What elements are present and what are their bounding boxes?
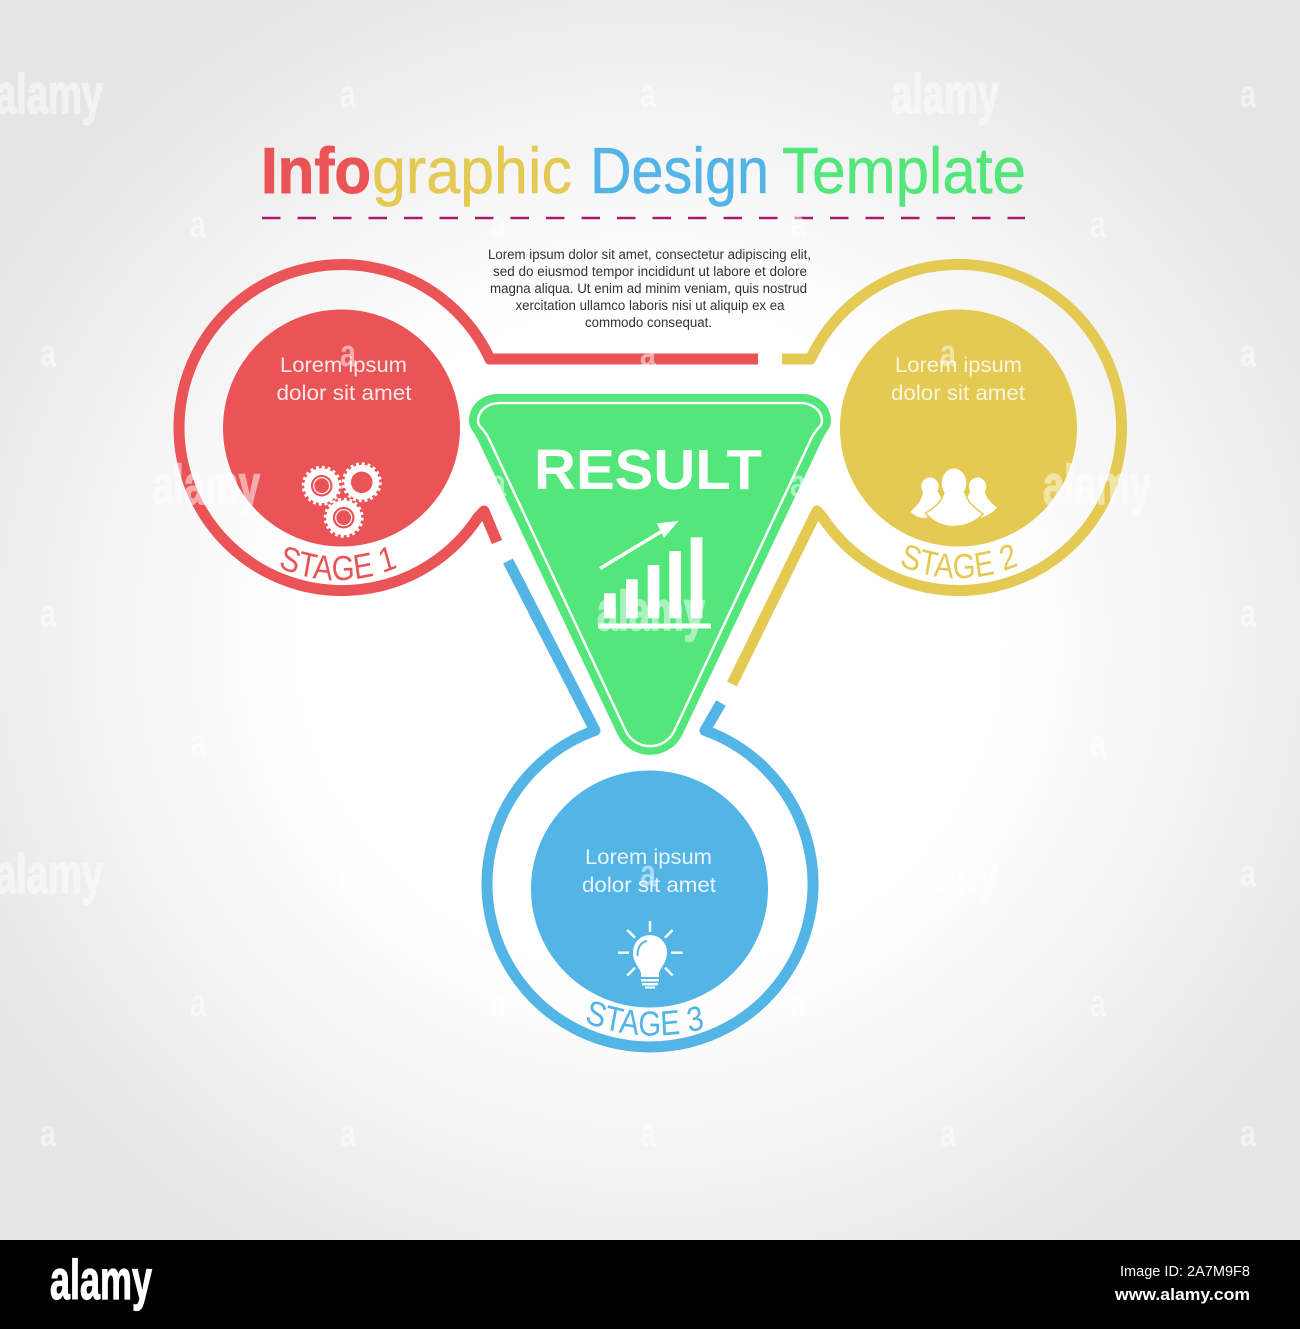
watermarks: small: a [1240, 333, 1257, 375]
watermarks: small: a [1240, 853, 1257, 895]
stage 3 text: Lorem ipsum [585, 846, 712, 869]
watermarks: small: a [1240, 1113, 1257, 1155]
watermarks: large [0, 62, 1151, 905]
intro paragraph: commodo consequat. [585, 315, 712, 330]
watermarks: small: a [490, 723, 507, 765]
panel: stage 1 [174, 259, 758, 596]
watermarks: small: a [940, 1113, 957, 1155]
triangle shape [469, 394, 831, 755]
title: Template [782, 134, 1026, 207]
watermarks: small: a [340, 74, 357, 116]
footer url: www.alamy.com [1114, 1285, 1250, 1304]
watermarks: small: a [190, 204, 207, 246]
triangle inner outline [478, 403, 822, 746]
watermarks: small: a [790, 983, 807, 1025]
intro paragraph: xercitation ullamco laboris nisi ut aliquip ex ea [516, 298, 785, 313]
watermarks: small: a [40, 593, 57, 635]
stage 1 text [276, 354, 412, 405]
footer bar [0, 1240, 1300, 1329]
watermarks: large: alamy [152, 453, 260, 516]
title [261, 134, 1026, 207]
stage 2 label [902, 544, 1018, 578]
watermarks: small: a [940, 333, 957, 375]
title: Design [590, 134, 769, 207]
stage 2 text: Lorem ipsum [895, 354, 1022, 377]
result heading: RESULT [534, 438, 762, 502]
watermarks: large: alamy [597, 579, 705, 642]
stage 2 ring connector [732, 264, 1122, 684]
watermarks: small: a [490, 463, 507, 505]
intro paragraph [488, 247, 811, 330]
footer logo: alamy [50, 1248, 152, 1311]
footer image id: Image ID: 2A7M9F8 [1120, 1263, 1250, 1280]
watermarks: small: a [1240, 593, 1257, 635]
stage 2 text: dolor sit amet [891, 382, 1025, 405]
watermarks: small: a [340, 333, 357, 375]
intro paragraph: magna aliqua. Ut enim ad minim veniam, quis nostrud [490, 281, 807, 296]
watermarks: small: a [1090, 983, 1107, 1025]
stage 1 ring connector [179, 265, 758, 591]
watermarks: small: a [640, 333, 657, 375]
watermarks: small: a [640, 1113, 657, 1155]
intro paragraph: sed do eiusmod tempor incididunt ut labore et dolore [493, 264, 807, 279]
watermarks: small: a [640, 74, 657, 116]
panel: stage 2 [727, 258, 1128, 686]
title: Info [261, 134, 371, 207]
stage 1 label: STAGE 1 [280, 547, 397, 580]
watermarks: small: a [790, 723, 807, 765]
watermarks: small: a [1240, 74, 1257, 116]
panel: result triangle [469, 394, 831, 755]
watermarks: small: a [190, 983, 207, 1025]
stage 3 disc [531, 770, 768, 1008]
icon: rising bar chart [598, 521, 711, 628]
stage 1 disc [223, 310, 460, 546]
stage 2 text [891, 354, 1025, 405]
watermarks: small: a [490, 983, 507, 1025]
stage 2 disc [840, 310, 1077, 546]
watermarks: small: a [40, 333, 57, 375]
stage 1 text: dolor sit amet [276, 382, 412, 405]
watermarks: small: a [790, 463, 807, 505]
watermarks: small: a [940, 593, 957, 635]
icon: people [910, 468, 997, 526]
icon: light bulb [618, 921, 682, 988]
watermarks: small: a [490, 204, 507, 246]
watermarks: small: a [1090, 723, 1107, 765]
stage 3 ring connector [487, 561, 813, 1047]
watermarks: small: a [640, 853, 657, 895]
watermarks: small [40, 74, 1257, 1155]
watermarks: large: alamy [1043, 453, 1151, 516]
watermarks: small: a [190, 723, 207, 765]
panel: stage 3 [481, 558, 819, 1052]
watermarks: large: alamy [891, 842, 999, 905]
watermarks: small: a [1090, 204, 1107, 246]
stage 1 label [280, 547, 397, 580]
stage 3 label [586, 1002, 703, 1036]
watermarks: small: a [340, 593, 357, 635]
stage 3 label: STAGE 3 [586, 1002, 703, 1036]
stage 2 label: STAGE 2 [902, 544, 1018, 578]
stage 3 text: dolor sit amet [582, 874, 716, 897]
stage 1 text: Lorem ipsum [280, 354, 407, 377]
watermarks: small: a [340, 1113, 357, 1155]
watermarks: small: a [340, 853, 357, 895]
title: graphic [372, 134, 572, 207]
watermarks: large: alamy [891, 62, 999, 125]
title dashed divider [262, 217, 1025, 219]
watermarks: small: a [790, 204, 807, 246]
intro paragraph: Lorem ipsum dolor sit amet, consectetur adipiscing elit, [488, 247, 811, 262]
icon: gears [303, 464, 380, 536]
stage 3 text [582, 846, 716, 897]
watermarks: small: a [40, 1113, 57, 1155]
